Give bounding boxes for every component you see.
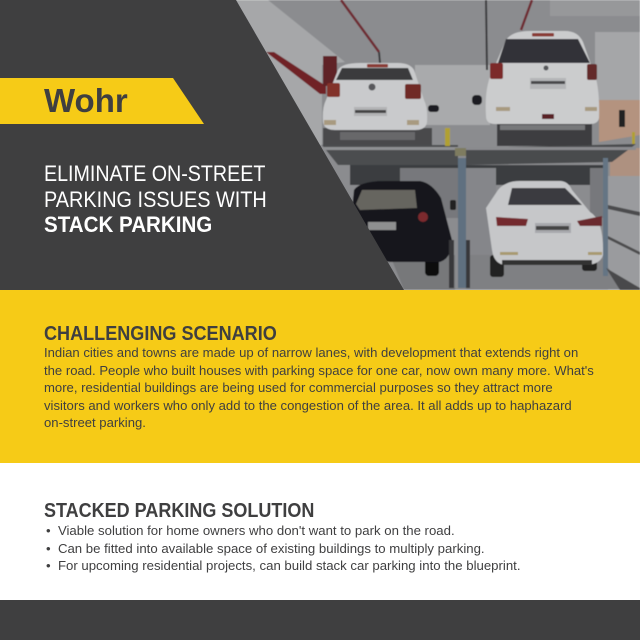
body text: scenario description: Indian cities and towns are made up of narrow lanes, with development that extends right on xyxy=(44,345,578,360)
body text: scenario description xyxy=(44,345,594,430)
body text: scenario description: on-street parking. xyxy=(44,415,146,430)
headline: PARKING ISSUES WITH xyxy=(44,187,267,212)
body text: scenario description: visitors and workers who only add to the congestion of the area. It all adds up to haphazard xyxy=(44,398,572,412)
upper deck platform xyxy=(322,128,636,165)
panel: challenging scenario xyxy=(0,290,640,463)
bullet list: • For upcoming residential projects, can build stack car parking into the blueprint. xyxy=(46,558,520,573)
bullet list: • Can be fitted into available space of existing buildings to multiply parking. xyxy=(46,541,485,556)
red pipes xyxy=(266,0,532,94)
body text: scenario description: the road. People who built houses with parking space for one car, now own many more. What's xyxy=(44,362,594,378)
heading: challenging scenario: CHALLENGING SCENARIO xyxy=(44,323,277,345)
photo: stacked parking with cars xyxy=(236,0,640,290)
dark header panel xyxy=(0,0,404,290)
posts and rails xyxy=(449,158,640,290)
footer band xyxy=(0,600,640,640)
body text: scenario description: more, residential buildings are being used for commercial purposes so they attract more xyxy=(44,380,553,395)
headline xyxy=(44,161,267,237)
headline: ELIMINATE ON-STREET xyxy=(44,161,265,186)
upper right white car xyxy=(472,31,599,146)
lower black car xyxy=(352,181,456,276)
bullet list: • Viable solution for home owners who don't want to park on the road. xyxy=(46,523,455,538)
lower white car xyxy=(486,181,603,277)
floor xyxy=(390,255,622,290)
bullet list xyxy=(46,523,520,573)
heading: stacked parking solution: STACKED PARKING SOLUTION xyxy=(44,500,314,522)
logo banner xyxy=(0,78,204,124)
ceiling and walls xyxy=(230,0,640,290)
upper left white car xyxy=(323,63,439,146)
headline: STACK PARKING xyxy=(44,212,212,237)
logo banner: Wohr xyxy=(44,82,128,119)
panel: stacked parking solution xyxy=(0,463,640,600)
